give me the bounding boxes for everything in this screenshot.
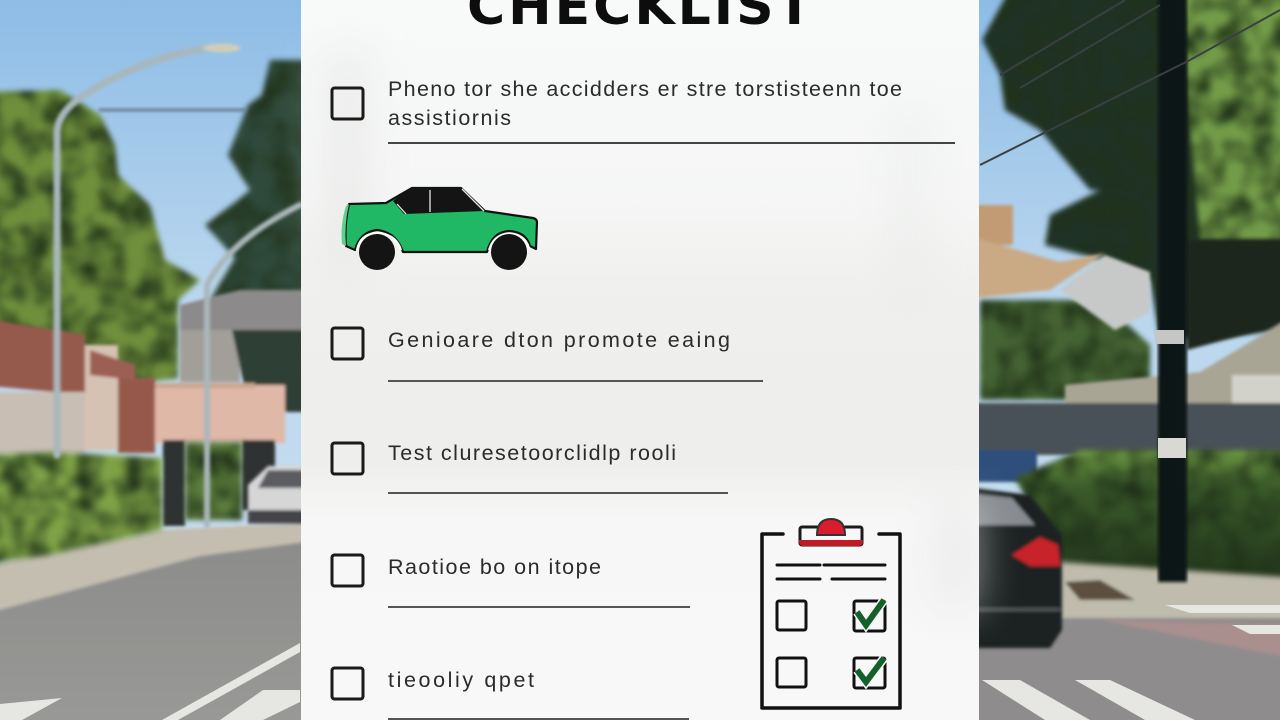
right side buildings and road <box>975 205 1280 720</box>
left side trees <box>0 60 320 385</box>
panel: checklist card <box>301 0 979 720</box>
left side buildings and road <box>0 290 320 720</box>
right hedge <box>1015 450 1280 578</box>
parked white car <box>248 466 320 525</box>
checklist item 1: assistiornis <box>388 106 511 130</box>
street lamps <box>57 44 300 525</box>
icon: clipboard with checks <box>762 519 900 708</box>
checklist item 4 <box>332 555 690 608</box>
checklist item 5: tieooliy qpet <box>388 668 534 692</box>
checklist item 2 <box>332 328 763 382</box>
checklist item 4: Raotioe bo on itope <box>388 555 601 579</box>
checklist item 1 <box>332 77 955 144</box>
left hedge <box>0 442 242 565</box>
checklist item 3 <box>332 441 728 494</box>
checklist item 5 <box>332 668 689 720</box>
crosswalk stripes <box>0 605 1280 720</box>
icon: green car <box>342 188 537 270</box>
utility pole and wires <box>980 0 1280 582</box>
right side trees <box>980 0 1280 400</box>
checklist item 2: Genioare dton promote eaing <box>388 328 730 352</box>
checklist item 3: Test cluresetoorclidlp rooli <box>388 441 676 465</box>
checklist item 1: Pheno tor she accidders er stre torstisteenn toe <box>388 77 902 101</box>
black parked car <box>975 488 1062 648</box>
